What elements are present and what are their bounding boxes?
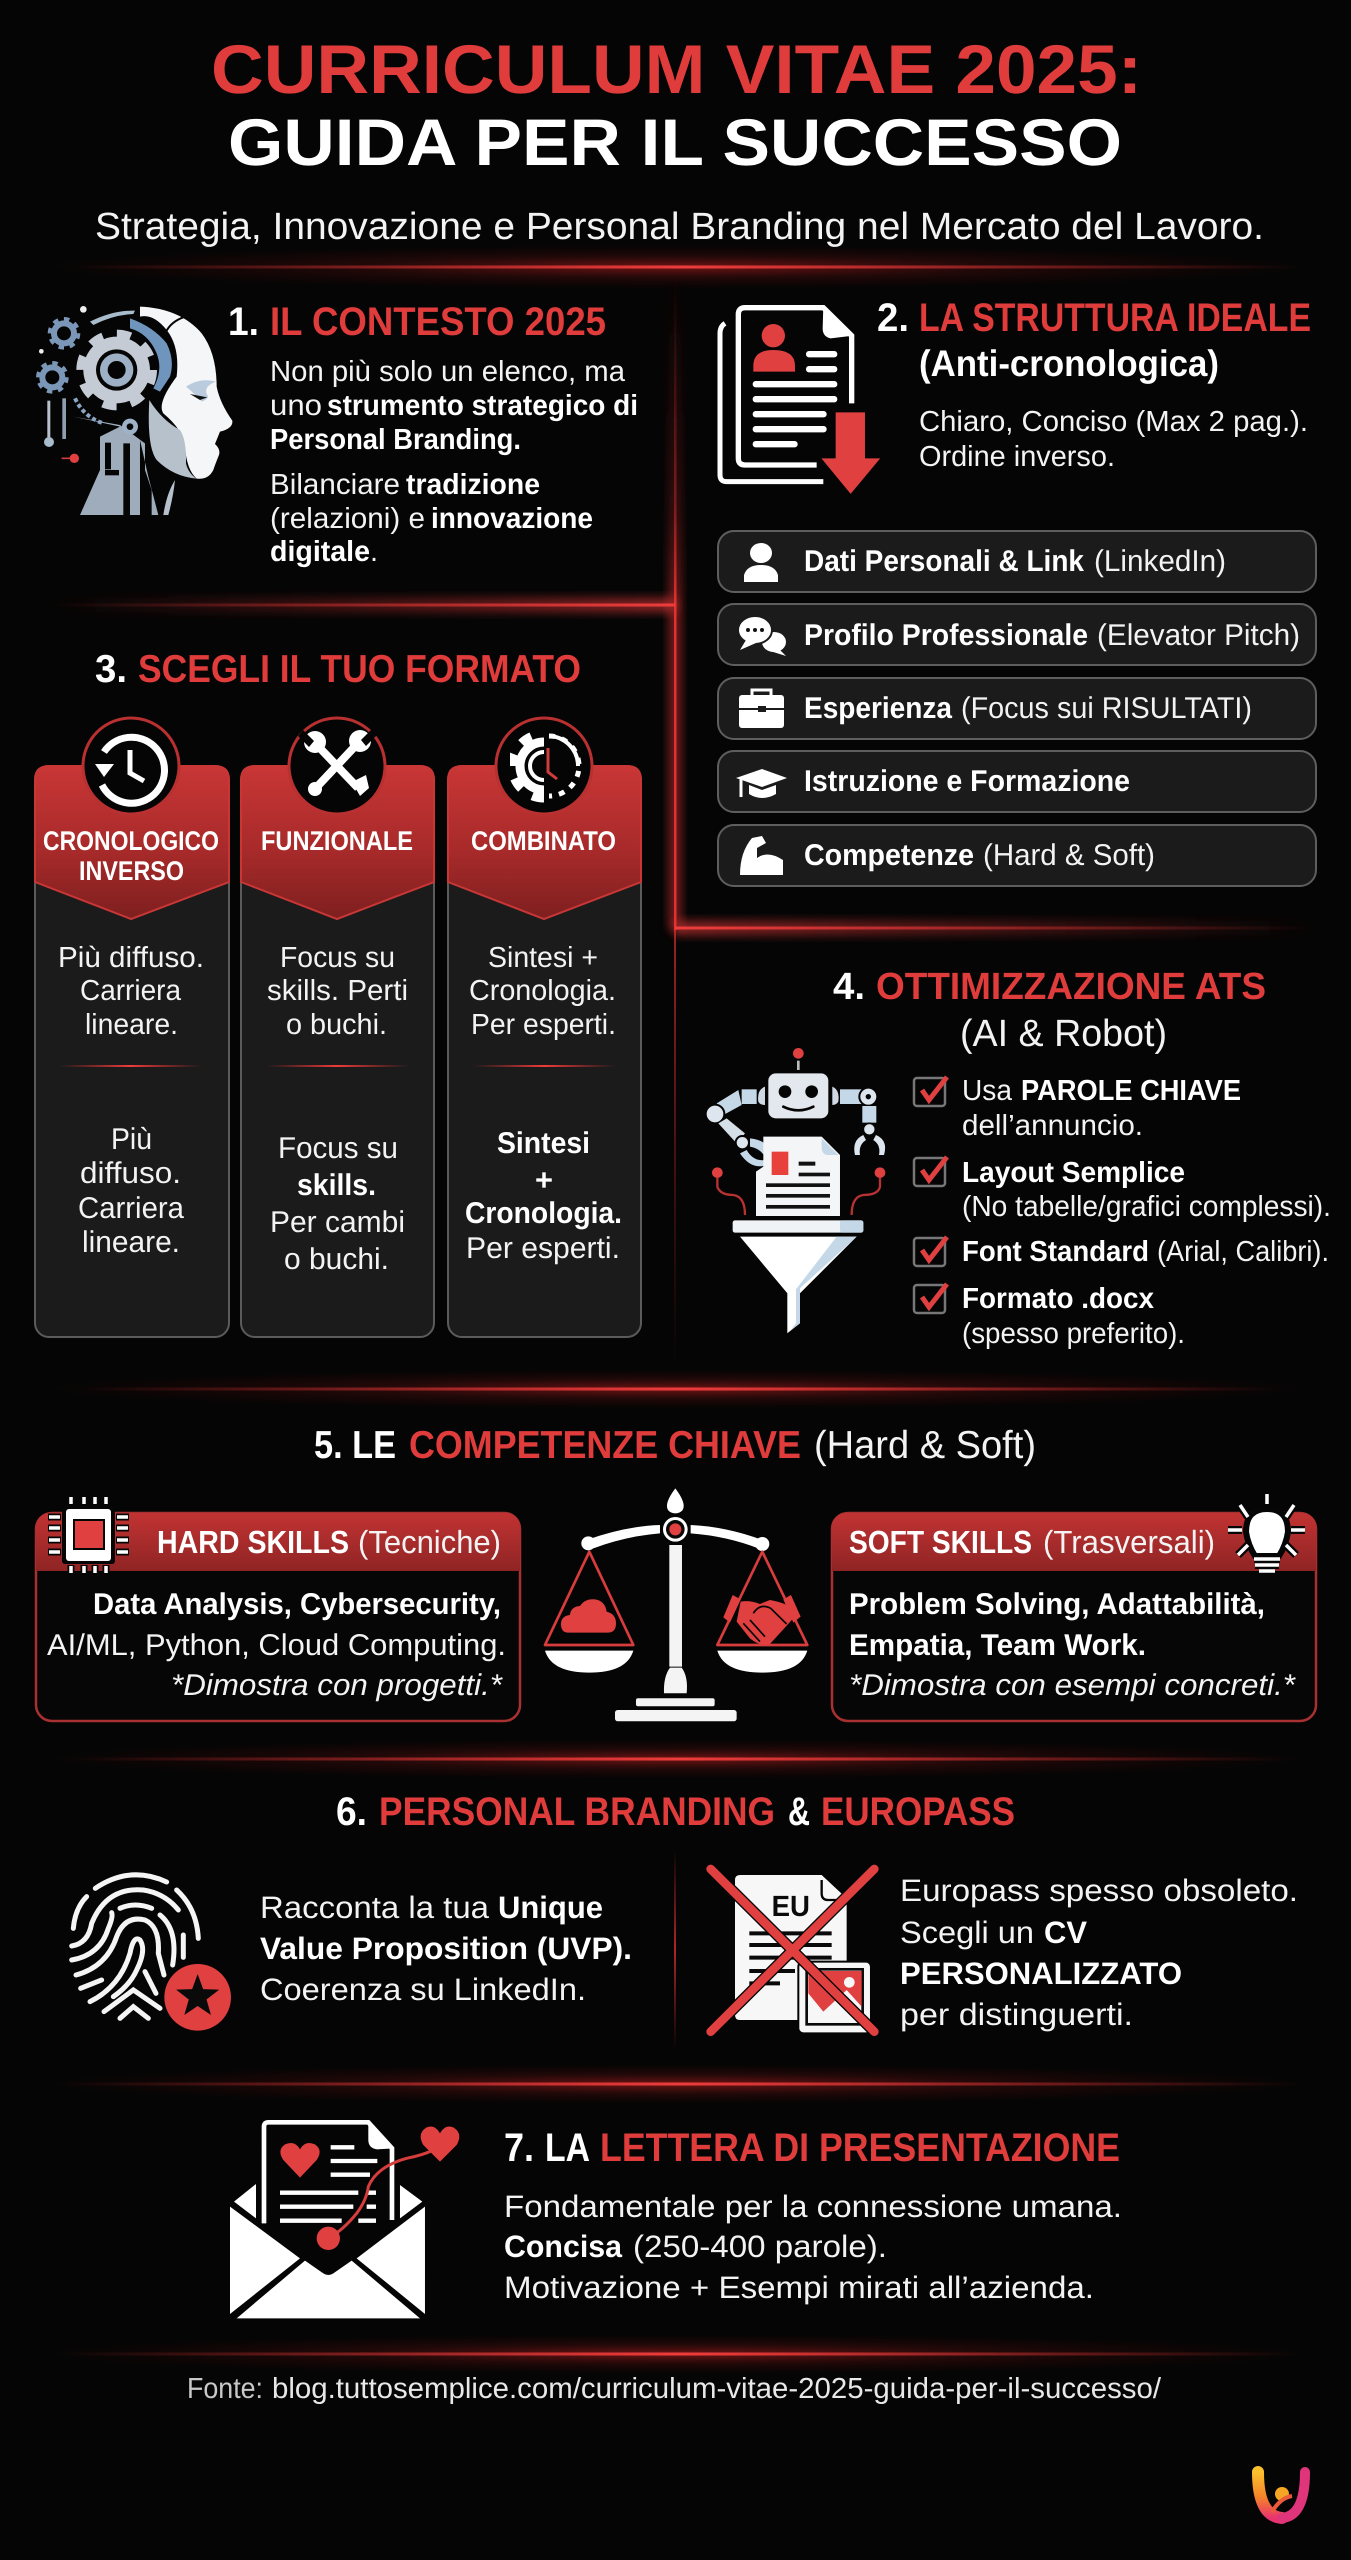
- check item: font: Font Standard: [962, 1236, 1149, 1268]
- icon: gear and clock: [512, 734, 579, 798]
- panel: section 5 skills: [36, 1424, 1316, 1721]
- card: funzionale: [241, 718, 434, 1337]
- icon: robot sorting CV into funnel: [706, 1048, 885, 1333]
- card: funzionale: skills.: [297, 1169, 376, 1202]
- card: combinato: Sintesi: [497, 1127, 590, 1160]
- row: skills: Competenze: [804, 839, 974, 872]
- source line: Fonte:: [187, 2373, 263, 2405]
- heading 1: IL CONTESTO 2025: [270, 300, 606, 344]
- card: combinato: +: [535, 1164, 553, 1197]
- subtitle: Strategia, Innovazione e Personal Branding nel Mercato del Lavoro.: [95, 206, 1264, 248]
- card: cronologico inverso: diffuso.: [80, 1157, 181, 1190]
- heading 6: EUROPASS: [821, 1790, 1015, 1834]
- heading 4: [833, 966, 1266, 1055]
- icon: crossed out Europass: EU: [772, 1889, 810, 1922]
- icon: crossed out Europass: [711, 1869, 874, 2033]
- heading 1: 1.: [228, 300, 259, 344]
- text block 7: Motivazione + Esempi mirati all’azienda.: [504, 2270, 1094, 2305]
- card: funzionale: Focus su: [280, 942, 395, 974]
- text block 7: Fondamentale per la connessione umana.: [504, 2189, 1122, 2224]
- card: funzionale: Focus su: [278, 1132, 398, 1165]
- panel: hard skills: *Dimostra con progetti.*: [171, 1669, 503, 1702]
- row: skills: [718, 825, 1316, 886]
- row: professional profile: (Elevator Pitch): [1097, 619, 1300, 652]
- heading 6: 6.: [336, 1790, 367, 1834]
- source line: blog.tuttosemplice.com/curriculum-vitae-2025-guida-per-il-successo/: [272, 2373, 1162, 2405]
- text block 2: Ordine inverso.: [919, 441, 1115, 473]
- text block 1: uno: [270, 390, 322, 422]
- row: professional profile: Profilo Professionale: [804, 619, 1088, 652]
- text block 1: [270, 356, 638, 568]
- panel: section 7 cover letter: [230, 2120, 1122, 2318]
- text block: Europass: Europass spesso obsoleto.: [900, 1873, 1298, 1908]
- card: combinato: Per esperti.: [471, 1009, 616, 1041]
- card: funzionale: skills. Perti: [267, 975, 408, 1007]
- panel: soft skills: SOFT SKILLS: [849, 1524, 1032, 1560]
- heading 2: [877, 296, 1311, 384]
- icon: light bulb: [1228, 1494, 1305, 1571]
- panel: section 4 ATS: [706, 966, 1331, 1350]
- icon: microchip: [48, 1496, 129, 1574]
- check item: layout: Layout Semplice: [962, 1157, 1185, 1189]
- panel: section 2 structure: [718, 296, 1316, 886]
- heading 6: &: [788, 1790, 810, 1834]
- row: education: [718, 751, 1316, 812]
- row: personal data: [718, 531, 1316, 592]
- checklist: [914, 1075, 1331, 1350]
- row: experience: [718, 678, 1316, 739]
- card: combinato: Cronologia.: [469, 975, 616, 1007]
- heading 4: 4.: [833, 966, 865, 1008]
- icon: fingerprint with star: [72, 1875, 231, 2031]
- icon: envelope with letter and hearts: [230, 2120, 459, 2318]
- panel: section 6 branding: [72, 1790, 1298, 2049]
- check item: layout: [914, 1157, 1331, 1223]
- check item: keywords: Usa: [962, 1075, 1013, 1107]
- icon: crossed tools: [298, 729, 377, 796]
- card: funzionale: FUNZIONALE: [261, 826, 413, 856]
- text block: Europass: per distinguerti.: [900, 1997, 1133, 2032]
- check item: font: [914, 1236, 1329, 1268]
- panel: hard skills: AI/ML, Python, Cloud Computing.: [47, 1629, 506, 1662]
- card: combinato: COMBINATO: [471, 826, 616, 856]
- text block: Europass: Scegli un: [900, 1915, 1034, 1950]
- row: experience: (Focus sui RISULTATI): [961, 692, 1252, 725]
- panel: soft skills: [832, 1494, 1316, 1721]
- check item: docx: (spesso preferito).: [962, 1318, 1185, 1350]
- card: cronologico inverso: INVERSO: [79, 856, 184, 886]
- text block 1: (relazioni) e: [270, 503, 425, 535]
- text block 1: .: [370, 536, 378, 568]
- card: combinato: Cronologia.: [465, 1197, 622, 1230]
- heading 6: PERSONAL BRANDING: [379, 1790, 775, 1834]
- text block: UVP: Coerenza su LinkedIn.: [260, 1972, 586, 2007]
- list: CV sections: [718, 531, 1316, 886]
- heading 5: 5. LE: [314, 1424, 396, 1467]
- heading 2: (Anti-cronologica): [919, 343, 1219, 384]
- icon: AI head with gears: [38, 306, 232, 515]
- heading 5: (Hard & Soft): [814, 1424, 1036, 1467]
- card: cronologico inverso: lineare.: [82, 1226, 180, 1259]
- card: cronologico inverso: [35, 718, 229, 1337]
- heading 7: LETTERA DI PRESENTAZIONE: [600, 2126, 1120, 2170]
- text block 7: [504, 2189, 1122, 2305]
- row: education: Istruzione e Formazione: [804, 765, 1130, 798]
- card: cronologico inverso: Più diffuso.: [58, 942, 204, 974]
- card: cronologico inverso: Carriera: [80, 975, 182, 1007]
- card: cronologico inverso: Carriera: [78, 1192, 184, 1225]
- heading 2: 2.: [877, 296, 909, 340]
- text block 1: strumento strategico di: [327, 390, 638, 422]
- heading 4: (AI & Robot): [960, 1013, 1167, 1055]
- panel: soft skills: (Trasversali): [1043, 1524, 1215, 1560]
- card: combinato: Per esperti.: [466, 1232, 620, 1265]
- icon: history clock: [95, 737, 165, 803]
- title: [211, 31, 1142, 179]
- panel: soft skills: Empatia, Team Work.: [849, 1629, 1146, 1662]
- panel: hard skills: Data Analysis, Cybersecurity,: [93, 1588, 501, 1621]
- panel: soft skills: *Dimostra con esempi concreti.*: [849, 1669, 1296, 1702]
- check item: font: (Arial, Calibri).: [1157, 1236, 1329, 1268]
- panel: soft skills: Problem Solving, Adattabilità,: [849, 1588, 1265, 1621]
- card: funzionale: o buchi.: [286, 1009, 387, 1041]
- panel: section 1 context: [38, 300, 638, 568]
- title: GUIDA PER IL SUCCESSO: [228, 105, 1122, 179]
- heading 4: OTTIMIZZAZIONE ATS: [876, 966, 1266, 1008]
- panel: hard skills: [36, 1496, 520, 1721]
- card: combinato: Sintesi +: [488, 942, 598, 974]
- icon: balance scale: [545, 1488, 807, 1721]
- text block 7: (250-400 parole).: [633, 2229, 887, 2264]
- heading 7: LA: [545, 2126, 590, 2170]
- text block 1: Non più solo un elenco, ma: [270, 356, 626, 388]
- text block: Europass: PERSONALIZZATO: [900, 1956, 1182, 1991]
- text block: Europass: CV: [1044, 1915, 1087, 1950]
- text block 1: Bilanciare: [270, 469, 400, 501]
- check item: docx: [914, 1283, 1185, 1350]
- text block 7: Concisa: [504, 2229, 623, 2264]
- row: personal data: Dati Personali & Link: [804, 545, 1084, 578]
- row: skills: (Hard & Soft): [983, 839, 1155, 872]
- icon: logo: [1258, 2472, 1305, 2518]
- card: funzionale: Per cambi: [270, 1206, 405, 1239]
- heading 3: SCEGLI IL TUO FORMATO: [138, 648, 581, 691]
- title: CURRICULUM VITAE 2025:: [211, 31, 1142, 108]
- text block 1: tradizione: [406, 469, 540, 501]
- heading 5: COMPETENZE CHIAVE: [409, 1424, 801, 1467]
- heading 3: 3.: [95, 648, 127, 691]
- row: personal data: (LinkedIn): [1094, 545, 1226, 578]
- check item: docx: Formato .docx: [962, 1283, 1154, 1315]
- card: combinato: [448, 718, 641, 1337]
- panel: section 3 formats: [35, 648, 641, 1337]
- text block: UVP: Value Proposition (UVP).: [260, 1931, 632, 1966]
- text block 1: Personal Branding.: [270, 424, 521, 456]
- card: funzionale: o buchi.: [284, 1243, 389, 1276]
- text block 1: digitale: [270, 536, 370, 568]
- card: cronologico inverso: CRONOLOGICO: [43, 826, 219, 856]
- check item: keywords: PAROLE CHIAVE: [1021, 1075, 1241, 1107]
- text block: Europass: [900, 1873, 1298, 2032]
- row: experience: Esperienza: [804, 692, 952, 725]
- text block: UVP: Unique: [498, 1890, 603, 1925]
- heading 6: [336, 1790, 1015, 1834]
- check item: keywords: [914, 1075, 1241, 1142]
- text block 1: innovazione: [431, 503, 593, 535]
- row: professional profile: [718, 604, 1316, 665]
- check item: keywords: dell’annuncio.: [962, 1110, 1143, 1142]
- check item: layout: (No tabelle/grafici complessi).: [962, 1191, 1331, 1223]
- text block: UVP: Racconta la tua: [260, 1890, 490, 1925]
- card: cronologico inverso: Più: [111, 1123, 152, 1156]
- heading 5: [314, 1424, 1036, 1467]
- text block 2: [919, 406, 1308, 473]
- text block 2: Chiaro, Conciso (Max 2 pag.).: [919, 406, 1308, 438]
- icon: CV document with down arrow: [720, 307, 882, 495]
- heading 7: 7.: [504, 2126, 534, 2170]
- text block: UVP: [260, 1890, 632, 2007]
- panel: hard skills: HARD SKILLS: [157, 1524, 349, 1560]
- card: cronologico inverso: lineare.: [85, 1009, 178, 1041]
- panel: hard skills: (Tecniche): [358, 1524, 501, 1560]
